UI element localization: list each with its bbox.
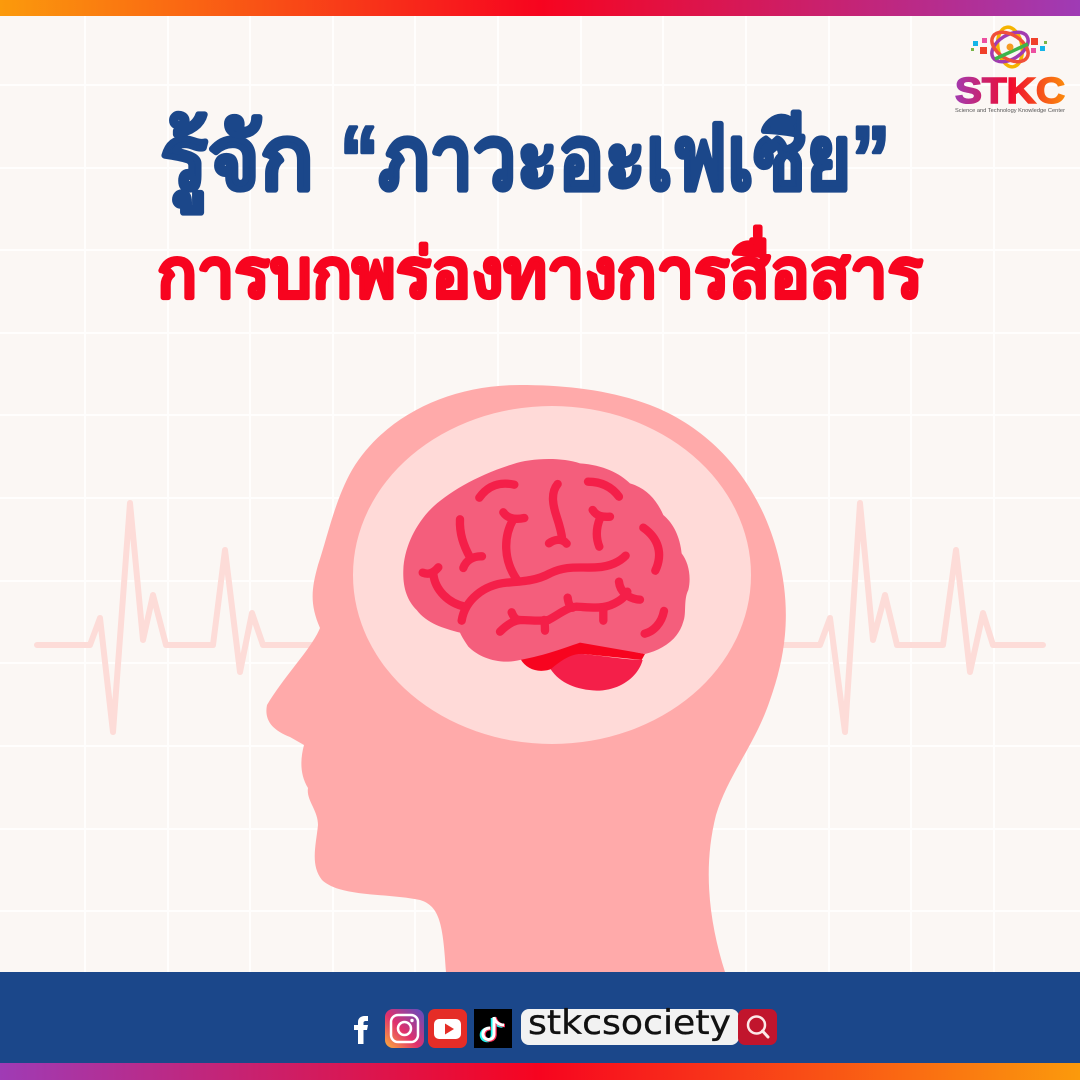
logo: STKC [955,25,1065,114]
bottom gradient bar [0,1063,1080,1080]
title [160,109,890,214]
brain folds [423,482,664,634]
icon: brain [403,459,690,691]
icon: atom logo mark [971,25,1047,69]
ECG line: left [37,503,325,732]
brain stem band [521,640,645,671]
icon: search button [738,1009,777,1045]
icon: youtube [428,1009,467,1048]
icon: instagram [385,1009,424,1048]
logo tagline: Science and Technology Knowledge Center [955,108,1065,114]
subtitle: การบกพร่องทางการสื่อสาร [157,225,923,312]
title: รู้จัก [160,109,314,214]
cerebrum [403,459,690,662]
top gradient bar [0,0,1080,16]
inner head circle [353,406,751,744]
icon: facebook [354,1016,368,1044]
ECG line: right [775,503,1043,732]
search pill [521,1003,739,1045]
logo wordmark: STKC [955,70,1065,111]
head silhouette [266,385,786,972]
search pill text: stkcsociety [528,1003,731,1043]
icon: tiktok [474,1009,512,1048]
title: “ภาวะอะเฟเซีย” [340,109,890,209]
footer band [0,972,1080,1063]
cerebellum [551,654,643,691]
